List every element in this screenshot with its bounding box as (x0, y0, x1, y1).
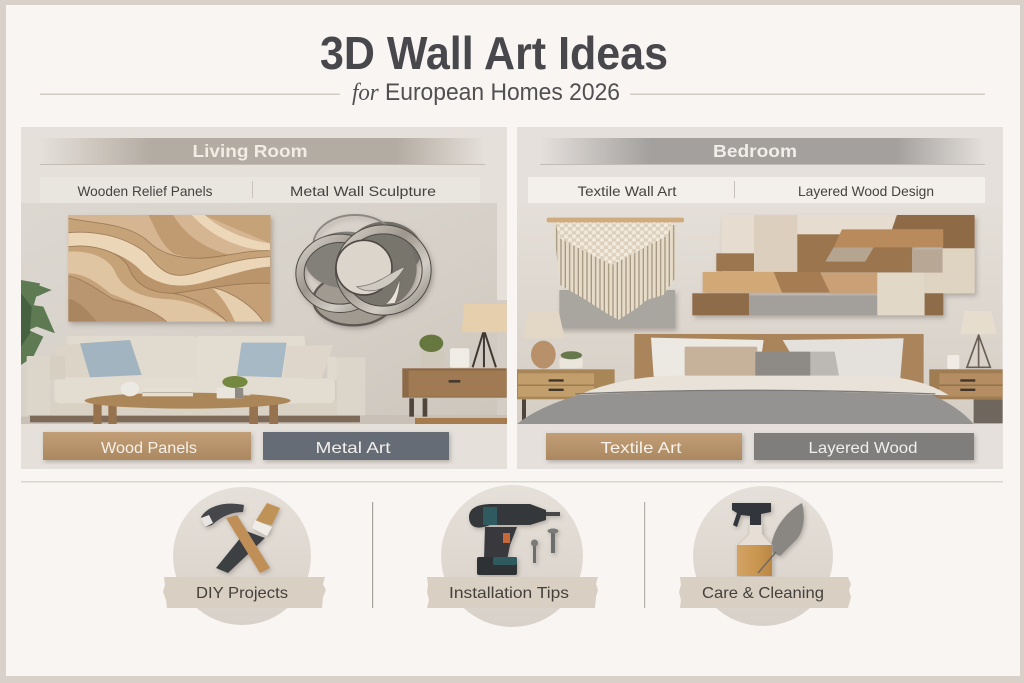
tag: textile art: Textile Art (600, 440, 682, 457)
artwork: layered wood panels (692, 215, 975, 315)
side table with lamp and pots (402, 304, 507, 417)
tag: wood panels: Wood Panels (101, 440, 197, 457)
label: installation tips (427, 577, 598, 608)
label: care and cleaning: Care & Cleaning (702, 585, 824, 602)
label: DIY projects (163, 577, 326, 608)
label: DIY projects: DIY Projects (196, 585, 288, 602)
labels: bedroom artworks: Layered Wood Design (798, 183, 934, 199)
artwork: macrame textile (547, 218, 684, 328)
heading: living room (40, 138, 485, 165)
illustration: bedroom scene (517, 203, 1003, 424)
divider lines (21, 481, 1003, 608)
tip: installation tips (427, 485, 598, 627)
labels: bedroom artworks (528, 177, 985, 203)
tag: layered wood (754, 433, 974, 460)
labels: living room artworks: Wooden Relief Panels (78, 183, 212, 199)
sofa (27, 336, 365, 424)
icon: cordless drill and screws (469, 504, 560, 575)
label: installation tips: Installation Tips (449, 585, 569, 602)
right nightstand and lamp (929, 311, 1003, 423)
tag: wood panels (43, 432, 251, 460)
coffee table (85, 376, 291, 424)
panel: living room (21, 127, 507, 469)
panel: bedroom (517, 127, 1003, 469)
icon: spray bottle and duster (732, 503, 804, 576)
subtitle: for European Homes 2026 (352, 79, 620, 106)
heading: living room: Living Room (192, 141, 308, 161)
heading: bedroom: Bedroom (713, 141, 797, 161)
tag: layered wood: Layered Wood (808, 440, 918, 457)
icon: hammer and brush (201, 503, 280, 573)
labels: living room artworks (40, 177, 480, 203)
label: care and cleaning (679, 577, 851, 608)
artwork: wooden relief panel (68, 215, 271, 322)
tag: textile art (546, 433, 742, 460)
title: 3D Wall Art Ideas (320, 27, 668, 79)
left nightstand and lamp (517, 311, 615, 423)
illustration: living room scene (21, 203, 507, 424)
plant (21, 280, 55, 417)
tip: care and cleaning (679, 486, 851, 626)
bed (517, 334, 974, 424)
tip: DIY projects (163, 487, 326, 625)
heading: bedroom (540, 138, 985, 165)
labels: bedroom artworks: Textile Wall Art (578, 183, 677, 199)
tag: metal art (263, 432, 449, 460)
artwork: metal wall sculpture (300, 215, 427, 325)
labels: living room artworks: Metal Wall Sculpture (290, 183, 436, 199)
tag: metal art: Metal Art (316, 440, 391, 457)
